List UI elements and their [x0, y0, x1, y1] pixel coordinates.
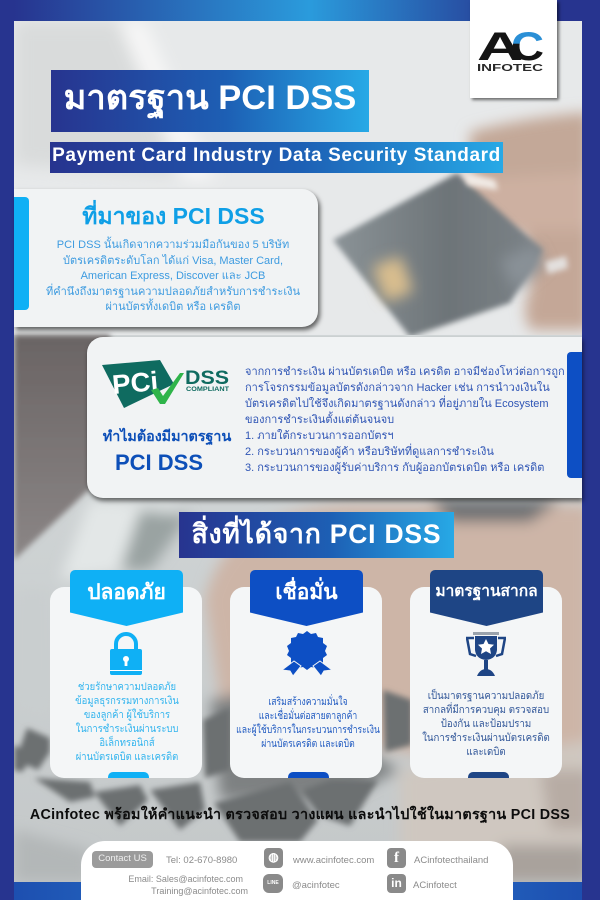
icon: trophy: [466, 632, 506, 676]
text: ป้องกัน และป้อมปราม: [441, 718, 531, 730]
facebook name: ACinfotecthailand: [414, 855, 488, 866]
body text: บัตรเครดิตไปใช้จึงเกิดมาตรฐานดังกล่าว ที่อยู่ภายใน Ecosystem: [245, 398, 549, 410]
banner: เชื่อมั่น: [275, 581, 338, 604]
credit card: [333, 173, 543, 337]
body text: PCI DSS นั้นเกิดจากความร่วมมือกันของ 5 บริษัท: [57, 239, 289, 251]
body text: การโจรกรรมข้อมูลบัตรดังกล่าวจาก Hacker เช่น การนำวงเงินใน: [245, 382, 550, 394]
body text: 2. กระบวนการของผู้ค้า หรือบริษัทที่ดูแลการชำระเงิน: [245, 446, 494, 458]
logo: AC Infotec: INFOTEC: [477, 62, 544, 74]
icon: linkedin: [387, 874, 406, 893]
body text: 3. กระบวนการของผู้รับค่าบริการ กับผู้ออกบัตรเดบิต หรือ เครดิต: [245, 462, 544, 474]
heading: PCI DSS: PCI DSS: [115, 450, 203, 475]
body text: [245, 365, 565, 474]
heading: benefits of PCI DSS: สิ่งที่ได้จาก PCI DSS: [192, 519, 441, 549]
body text: จากการชำระเงิน ผ่านบัตรเดบิต หรือ เครดิต อาจมีช่องโหว่ต่อการถูก: [245, 366, 565, 378]
text: เสริมสร้างความมั่นใจ: [268, 696, 348, 708]
PCI DSS compliant logo: DSS: [185, 368, 229, 389]
card: [50, 587, 202, 778]
text: เป็นมาตรฐานความปลอดภัย: [428, 690, 544, 702]
panel: security: [50, 570, 202, 778]
icon: line: LINE: [267, 880, 279, 886]
body text: บัตรเครดิตระดับโลก ได้แก่ Visa, Master Card,: [63, 255, 283, 267]
call to action: ACinfotec พร้อมให้คำแนะนำ ตรวจสอบ วางแผน และนำไปใช้ในมาตรฐาน PCI DSS: [30, 807, 570, 823]
blue tab: [567, 352, 582, 478]
icon: padlock: [110, 632, 142, 675]
contact us badge: [92, 851, 153, 868]
text: [422, 688, 550, 758]
panel: origin of PCI DSS: [14, 189, 318, 327]
footer contact panel: [81, 841, 513, 900]
body text: 1. ภายใต้กระบวนการออกบัตรฯ: [245, 430, 394, 442]
heading: ทำไมต้องมีมาตรฐาน: [103, 429, 231, 445]
logo: AC Infotec: [477, 25, 544, 74]
tab: [468, 772, 509, 778]
top gradient bar: [14, 0, 582, 22]
icon: line: [263, 874, 283, 893]
icon: website: [264, 848, 283, 868]
text: อิเล็กทรอนิกส์: [99, 737, 155, 749]
body text: [46, 236, 300, 313]
text: และเชื่อมั่นต่อสายตาลูกค้า: [259, 710, 357, 722]
icon: facebook: f: [394, 850, 399, 866]
tab: [288, 772, 329, 778]
text: ข้อมูลธุรกรรมทางการเงิน: [75, 695, 179, 707]
email: Email: Sales@acinfotec.com: [128, 874, 243, 884]
telephone: Tel: 02-670-8980: [166, 855, 237, 866]
subtitle: [50, 142, 503, 173]
lower keyboard: [14, 335, 582, 882]
tab: [108, 772, 149, 778]
icon: award rosette: [283, 631, 331, 676]
body text: ของการชำระเงินตั้งแต่ต้นจนจบ: [245, 414, 394, 426]
text: และผู้ใช้บริการในกระบวนการชำระเงิน: [236, 724, 380, 736]
PCI DSS compliant logo: COMPLIANT: [186, 387, 229, 393]
heading: ที่มาของ PCI DSS: [82, 203, 265, 229]
text: ผ่านบัตรเครดิต และเดบิต: [261, 738, 355, 750]
text: ช่วยรักษาความปลอดภัย: [78, 681, 176, 693]
body text: ผ่านบัตรทั้งเดบิต หรือ เครดิต: [105, 301, 241, 313]
panel: confidence: [230, 570, 382, 778]
card: [410, 587, 562, 778]
panel: international standard: [410, 570, 562, 778]
text: ของลูกค้า ผู้ใช้บริการ: [84, 709, 170, 721]
banner: [430, 570, 543, 626]
icon: facebook: [387, 848, 406, 868]
body text: ที่คำนึงถึงมาตรฐานความปลอดภัยสำหรับการชำระเงิน: [46, 286, 300, 298]
icon: website: ◍: [268, 850, 279, 864]
linkedin name: ACinfotect: [413, 880, 457, 891]
logo: AC Infotec: C: [511, 25, 544, 69]
line id: @acinfotec: [292, 880, 340, 891]
blue tab: [14, 197, 29, 310]
text: [236, 694, 380, 750]
title: มาตรฐาน PCI DSS: [64, 79, 356, 117]
text: และเดบิต: [466, 746, 506, 758]
banner: [70, 570, 183, 626]
card: [230, 587, 382, 778]
text: สากลที่มีการควบคุม ตรวจสอบ: [423, 704, 549, 716]
banner: มาตรฐานสากล: [435, 583, 538, 600]
contact us badge: Contact US: [98, 853, 147, 864]
heading: benefits of PCI DSS: [179, 512, 454, 558]
body text: American Express, Discover และ JCB: [81, 270, 265, 282]
icon: linkedin: in: [391, 876, 402, 890]
logo panel: [470, 0, 557, 98]
subtitle: Payment Card Industry Data Security Standard: [52, 145, 501, 166]
PCI DSS compliant logo: [102, 360, 229, 408]
logo: AC Infotec: A: [477, 25, 523, 69]
text: ในการชำระเงินผ่านบัตรเครดิต: [422, 732, 550, 744]
banner: [250, 570, 363, 626]
website: www.acinfotec.com: [293, 855, 374, 866]
title: [51, 70, 369, 132]
bottom gradient bar: [14, 882, 582, 900]
email: [128, 874, 248, 896]
hand: [458, 112, 590, 330]
panel: why PCI DSS: [87, 337, 582, 498]
text: [75, 681, 179, 763]
PCI DSS compliant logo: PCi: [111, 366, 159, 400]
banner: ปลอดภัย: [87, 581, 166, 604]
email: Training@acinfotec.com: [151, 886, 248, 896]
text: ในการชำระเงินผ่านระบบ: [76, 723, 178, 735]
text: ผ่านบัตรเดบิต และเครดิต: [76, 751, 178, 763]
